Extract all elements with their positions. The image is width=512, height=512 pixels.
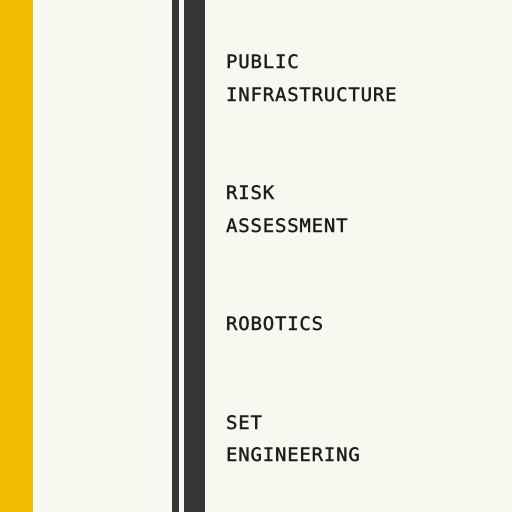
label: set engineering	[226, 412, 361, 466]
label: robotics: ROBOTICS	[226, 312, 324, 334]
label: set engineering: ENGINEERING	[226, 444, 361, 466]
label: public infrastructure	[226, 51, 397, 106]
label: risk assessment	[226, 182, 348, 237]
label: risk assessment: ASSESSMENT	[226, 215, 348, 237]
yellow vertical band	[0, 0, 33, 512]
label: risk assessment: RISK	[226, 182, 275, 204]
label: public infrastructure: INFRASTRUCTURE	[226, 84, 397, 106]
label: public infrastructure: PUBLIC	[226, 51, 299, 73]
wide dark vertical bar	[184, 0, 205, 512]
label: set engineering: SET	[226, 412, 263, 434]
thin dark vertical bar	[172, 0, 179, 512]
